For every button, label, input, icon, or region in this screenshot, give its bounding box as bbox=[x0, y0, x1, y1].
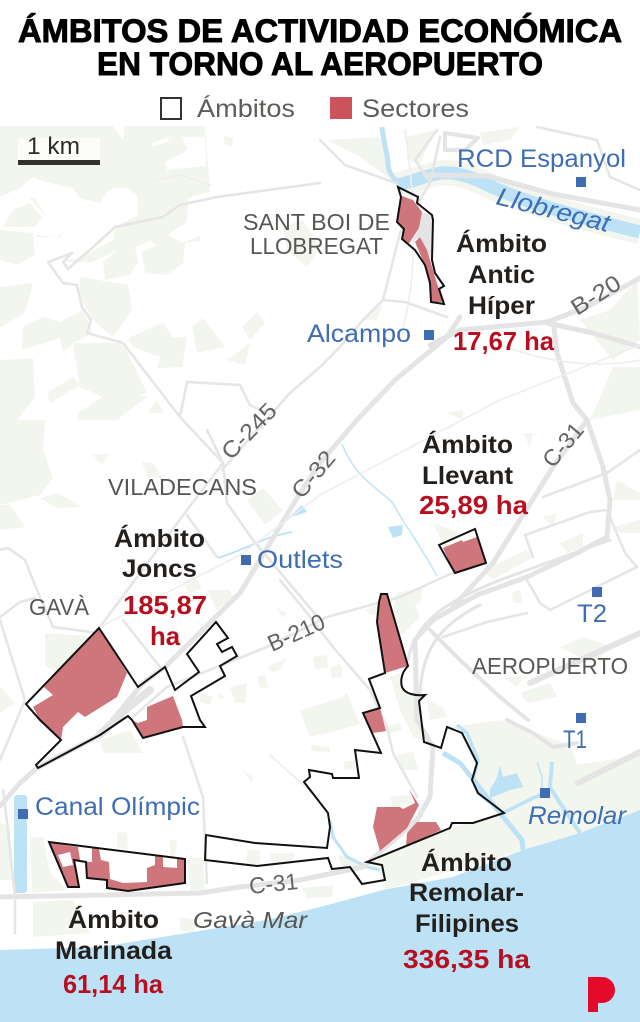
secondary roads bbox=[0, 127, 640, 933]
lakes bbox=[288, 505, 523, 798]
sectors bbox=[33, 196, 486, 891]
sector: Joncs west bbox=[33, 628, 127, 740]
label: Viladecans: VILADECANS bbox=[108, 474, 257, 500]
road: C-31 lower: C-31 bbox=[248, 868, 299, 899]
outline: Antic Híper bbox=[397, 187, 444, 304]
callout: Ámbito Llevant: Ámbito bbox=[422, 430, 513, 459]
title: ÁMBITOS DE ACTIVIDAD ECONÓMICA bbox=[18, 13, 622, 49]
callout: Ámbito Antic Híper: Ámbito bbox=[456, 229, 547, 258]
road: B-210: B-210 bbox=[263, 608, 329, 657]
outline: Joncs bbox=[26, 622, 237, 768]
callout: Ámbito Antic Híper: Antic bbox=[468, 261, 535, 289]
streams bbox=[218, 444, 580, 870]
poi: Canal Olímpic: Canal Olímpic bbox=[35, 793, 200, 821]
callout: Ámbito Antic Híper: Híper bbox=[468, 292, 535, 320]
label: Aeropuerto: AEROPUERTO bbox=[472, 653, 628, 679]
main roads bbox=[0, 133, 640, 897]
label: Gavà Mar: Gavà Mar bbox=[193, 907, 309, 933]
poi: T1: T1 bbox=[563, 726, 587, 754]
outline: Marinada bbox=[49, 842, 185, 891]
callout: Ámbito Joncs bbox=[114, 524, 207, 651]
poi: RCD Espanyol bbox=[457, 145, 626, 187]
callout: Ámbito Joncs: ha bbox=[150, 621, 181, 651]
callout: Ámbito Remolar-Filipines: Filipines bbox=[415, 910, 519, 938]
callout: Ámbito Remolar-Filipines bbox=[403, 848, 531, 974]
outline: Llevant bbox=[439, 529, 486, 573]
canal olímpic water bbox=[14, 795, 27, 893]
poi: Remolar bbox=[528, 788, 628, 830]
road: C-31 upper: C-31 bbox=[537, 417, 589, 472]
poi: Remolar: Remolar bbox=[528, 802, 628, 830]
outline: Remolar-Filipines bbox=[205, 594, 504, 884]
callout: Ámbito Marinada: Marinada bbox=[55, 937, 173, 965]
title: EN TORNO AL AEROPUERTO bbox=[97, 46, 543, 82]
legend: sectores swatch bbox=[330, 97, 352, 119]
callout: Ámbito Joncs: 185,87 bbox=[123, 590, 207, 620]
legend: sectores label: Sectores bbox=[362, 95, 469, 123]
poi: T1 bbox=[563, 713, 587, 754]
label: Sant Boi de Llobregat bbox=[243, 209, 390, 259]
icon: publisher logo bbox=[588, 977, 615, 1012]
poi: T2: T2 bbox=[577, 600, 607, 628]
legend: ámbitos label: Ámbitos bbox=[197, 94, 295, 123]
sector: Joncs east bbox=[132, 696, 183, 738]
road: C-245: C-245 bbox=[216, 397, 282, 464]
scale bar label: 1 km bbox=[27, 133, 80, 160]
poi: T2 bbox=[577, 587, 607, 628]
poi: RCD Espanyol: RCD Espanyol bbox=[457, 145, 626, 173]
callout: Ámbito Antic Híper: 17,67 ha bbox=[453, 326, 555, 356]
river Llobregat bbox=[397, 173, 640, 232]
callout: Ámbito Remolar-Filipines: Ámbito bbox=[421, 848, 512, 877]
callout: Ámbito Joncs: Joncs bbox=[122, 555, 197, 583]
callout: Ámbito Remolar-Filipines: 336,35 ha bbox=[403, 944, 531, 974]
sector: Remolar middle bbox=[363, 708, 386, 733]
sector: Remolar south bbox=[373, 789, 419, 851]
sector: Antic Híper bbox=[397, 196, 443, 302]
poi: Outlets: Outlets bbox=[257, 546, 343, 574]
green areas bbox=[0, 126, 640, 937]
callout: Ámbito Antic Híper bbox=[453, 229, 555, 356]
label: Llobregat river: Llobregat bbox=[494, 183, 614, 238]
thin roads bbox=[100, 130, 640, 800]
legend: ámbitos swatch bbox=[161, 98, 181, 119]
callout: Ámbito Llevant: Llevant bbox=[422, 462, 514, 490]
road: C-32: C-32 bbox=[286, 445, 341, 503]
callout: Ámbito Remolar-Filipines: Remolar- bbox=[409, 879, 524, 907]
callout: Ámbito Llevant bbox=[419, 430, 529, 520]
ámbito outlines bbox=[26, 187, 504, 891]
place labels bbox=[29, 209, 628, 933]
road: B-20: B-20 bbox=[566, 270, 625, 320]
poi: Alcampo: Alcampo bbox=[307, 320, 411, 348]
sector: Llevant bbox=[443, 537, 486, 573]
legend bbox=[161, 94, 469, 123]
callout: Ámbito Joncs: Ámbito bbox=[114, 524, 205, 553]
sector: Marinada bbox=[49, 842, 185, 891]
scale bar line bbox=[18, 160, 100, 165]
callout: Ámbito Llevant: 25,89 ha bbox=[419, 490, 529, 520]
sector: Remolar coast bbox=[406, 822, 441, 846]
sector: Remolar north bbox=[377, 594, 408, 673]
label: Sant Boi de Llobregat: LLOBREGAT bbox=[250, 233, 383, 259]
road labels bbox=[216, 270, 625, 899]
river upper branch bbox=[382, 127, 405, 184]
title bbox=[18, 13, 622, 82]
callout: Ámbito Marinada: 61,14 ha bbox=[63, 969, 164, 999]
label: Sant Boi de Llobregat: SANT BOI DE bbox=[243, 209, 390, 235]
callout: Ámbito Marinada bbox=[55, 905, 173, 999]
points of interest bbox=[18, 145, 628, 830]
callout: Ámbito Marinada: Ámbito bbox=[68, 905, 159, 934]
sea bbox=[0, 810, 640, 1022]
label: Gavà: GAVÀ bbox=[29, 594, 90, 620]
scale bar bbox=[18, 133, 100, 165]
